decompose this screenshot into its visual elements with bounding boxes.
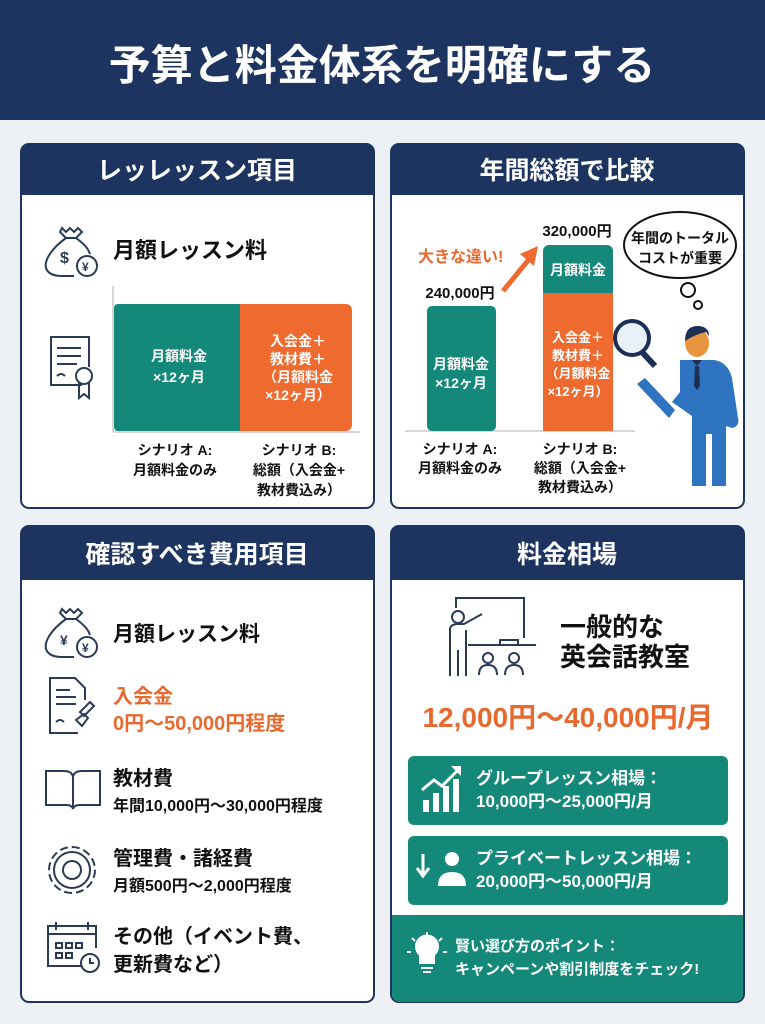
labels: scenarios: 総額（入会金+ — [253, 462, 345, 478]
item: materials: 年間10,000円～30,000円程度 — [113, 796, 323, 815]
heading: lesson items — [21, 144, 374, 195]
item: monthly fee: 月額レッスン料 — [113, 623, 260, 646]
icon: businessman with magnifier — [615, 321, 738, 486]
labels: scenarios: 総額（入会金+ — [534, 460, 626, 476]
bar chart: annual totals: ×12ヶ月 — [435, 375, 487, 391]
text: typical school — [560, 612, 690, 672]
labels: scenarios — [133, 442, 345, 498]
thought bubble — [624, 212, 736, 309]
icon: money bag: $ — [60, 250, 69, 267]
text: typical school: 一般的な — [560, 612, 664, 642]
labels: scenarios: シナリオ A: — [138, 442, 212, 458]
callout: tip: キャンペーンや割引制度をチェック! — [455, 960, 699, 978]
panel: annual comparison — [391, 144, 744, 508]
box: private lessons — [408, 836, 728, 905]
text: overall price range: 12,000円～40,000円/月 — [422, 702, 714, 733]
callout: big difference — [418, 246, 538, 291]
bar chart: annual totals: 320,000円 — [542, 223, 612, 240]
item: enrollment fee: 0円～50,000円程度 — [113, 712, 285, 735]
bar chart: scenarios: （月額料金 — [263, 369, 333, 385]
item: other — [48, 922, 313, 976]
icon: money bag — [46, 228, 97, 276]
labels: scenarios — [418, 441, 626, 495]
labels: scenarios: 月額料金のみ — [418, 460, 502, 476]
labels: scenarios: シナリオ B: — [543, 441, 617, 457]
panel: cost items to check — [21, 526, 374, 1002]
item: monthly fee — [46, 609, 260, 657]
thought bubble: コストが重要 — [638, 250, 722, 266]
bar chart: scenarios: ×12ヶ月） — [265, 387, 331, 403]
item: monthly fee: ¥ — [82, 641, 89, 655]
bar chart: scenarios: 月額料金 — [151, 348, 207, 364]
box: private lessons: プライベートレッスン相場： — [476, 849, 697, 868]
thought bubble: 年間のトータル — [631, 230, 729, 246]
labels: scenarios: 教材費込み） — [538, 479, 622, 495]
text: monthly lesson fee: 月額レッスン料 — [113, 238, 267, 263]
heading: price ranges — [391, 526, 744, 580]
item: materials — [46, 767, 323, 815]
item: admin fees — [49, 847, 292, 895]
item: other: その他（イベント費、 — [113, 925, 313, 948]
bar chart: scenarios: ×12ヶ月 — [153, 369, 205, 385]
bar chart: scenarios: 教材費＋ — [270, 351, 326, 367]
box: group lessons — [408, 756, 728, 825]
bar chart: scenarios — [113, 286, 360, 432]
labels: scenarios: 月額料金のみ — [133, 462, 217, 478]
icon: money bag: ¥ — [82, 260, 89, 274]
item: materials: 教材費 — [113, 767, 173, 790]
item: enrollment fee — [50, 678, 285, 735]
callout: tip — [392, 915, 743, 1002]
item: monthly fee: ¥ — [60, 632, 68, 648]
title banner — [0, 0, 765, 120]
heading: annual comparison — [391, 144, 744, 195]
bar chart: annual totals: 月額料金 — [550, 262, 606, 278]
item: enrollment fee: 入会金 — [113, 685, 173, 708]
callout: tip: 賢い選び方のポイント： — [455, 937, 620, 955]
text: typical school: 英会話教室 — [560, 642, 690, 672]
panel: lesson items — [21, 144, 374, 508]
callout: big difference: 大きな違い! — [418, 247, 503, 266]
box: group lessons: 10,000円～25,000円/月 — [476, 792, 653, 811]
bar chart: scenarios: 入会金＋ — [270, 333, 326, 349]
heading: lesson items: レッレッスン項目 — [97, 157, 297, 185]
labels: scenarios: 教材費込み） — [257, 482, 341, 498]
labels: scenarios: シナリオ A: — [423, 441, 497, 457]
heading: price ranges: 料金相場 — [517, 541, 617, 569]
item: other: 更新費など） — [113, 953, 233, 976]
labels: scenarios: シナリオ B: — [262, 442, 336, 458]
heading: annual comparison: 年間総額で比較 — [479, 157, 655, 185]
bar chart: annual totals: 入会金＋ — [552, 330, 604, 345]
bar chart: annual totals: 240,000円 — [425, 285, 495, 302]
panel: price ranges — [391, 526, 744, 1002]
bar chart: annual totals — [405, 223, 635, 431]
item: admin fees: 月額500円～2,000円程度 — [113, 876, 292, 895]
box: private lessons: 20,000円～50,000円/月 — [476, 872, 653, 891]
bar chart: annual totals: （月額料金 — [545, 366, 611, 381]
heading: cost items — [21, 526, 374, 580]
title banner: 予算と料金体系を明確にする — [109, 42, 655, 89]
box: group lessons: グループレッスン相場： — [476, 768, 662, 788]
icon: certificate — [51, 337, 92, 398]
bar chart: annual totals: 教材費＋ — [552, 348, 604, 363]
icon: classroom teacher — [450, 598, 536, 676]
heading: cost items: 確認すべき費用項目 — [85, 541, 309, 569]
item: admin fees: 管理費・諸経費 — [113, 847, 253, 870]
bar chart: annual totals: 月額料金 — [433, 356, 489, 372]
bar chart: annual totals: ×12ヶ月） — [547, 384, 609, 399]
